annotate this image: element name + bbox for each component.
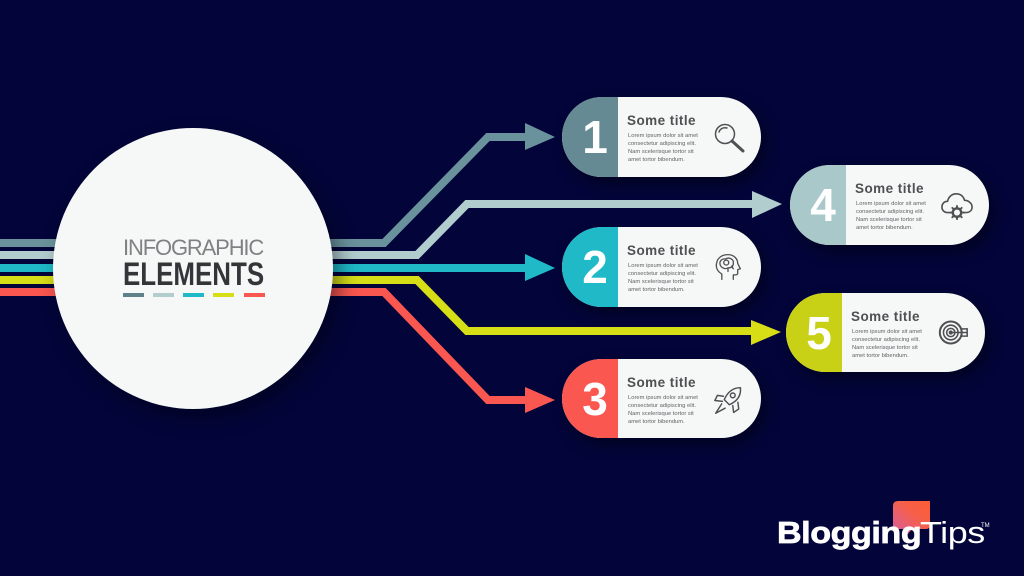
arrow: line 2 to card 2 — [0, 254, 555, 281]
body text 3: Lorem ipsum dolor sit amet — [628, 395, 698, 401]
tab 4 — [790, 165, 846, 245]
word: Blogging: Blogging — [777, 515, 921, 550]
body text 1 — [628, 133, 698, 163]
number 5: 5 — [806, 307, 832, 359]
body text 4: Lorem ipsum dolor sit amet — [856, 201, 926, 207]
body text 2: consectetur adipiscing elit. — [628, 271, 696, 277]
body text 4 — [856, 201, 926, 231]
tab 5 — [786, 293, 842, 372]
word: Tips: Tips — [920, 515, 985, 550]
title 1: Some title — [627, 113, 696, 128]
body text 3: Nam scelerisque tortor sit — [628, 411, 694, 417]
card 4 — [790, 165, 989, 245]
body text 1: Nam scelerisque tortor sit — [628, 149, 694, 155]
tab 1 — [562, 97, 618, 177]
icon: rocket — [714, 387, 742, 414]
body text 5: Nam scelerisque tortor sit — [852, 345, 918, 351]
body text 4: amet tortor bibendum. — [856, 225, 913, 231]
logo wordmark — [777, 515, 985, 550]
title 4: Some title — [855, 181, 924, 196]
title 3: Some title — [627, 375, 696, 390]
body text 5 — [852, 329, 922, 359]
arrow: line 4 to card 4 — [0, 191, 782, 255]
body text 3: amet tortor bibendum. — [628, 419, 685, 425]
tab 2 — [562, 227, 618, 307]
body text 5: consectetur adipiscing elit. — [852, 337, 920, 343]
body text 2 — [628, 263, 698, 293]
icon: target — [938, 320, 968, 344]
heading: infographic: INFOGRAPHIC — [123, 235, 263, 260]
title 2: Some title — [627, 243, 696, 258]
logo mark — [893, 501, 930, 534]
arrow: line 1 to card 1 — [0, 123, 555, 243]
trademark: TM — [981, 523, 990, 529]
icon: magnifier — [714, 124, 745, 153]
number 3: 3 — [582, 373, 608, 425]
heading: elements: ELEMENTS — [123, 256, 264, 292]
body text 4: consectetur adipiscing elit. — [856, 209, 924, 215]
number 4: 4 — [810, 179, 836, 231]
logo: BloggingTips — [777, 501, 990, 550]
central circle — [53, 128, 333, 409]
title 5: Some title — [851, 309, 920, 324]
body text 1: consectetur adipiscing elit. — [628, 141, 696, 147]
number 2: 2 — [582, 241, 608, 293]
card 5 — [786, 293, 985, 372]
icon: head with brain — [716, 254, 741, 280]
body text 2: amet tortor bibendum. — [628, 287, 685, 293]
card 1 — [562, 97, 761, 177]
body text 5: Lorem ipsum dolor sit amet — [852, 329, 922, 335]
body text 3: consectetur adipiscing elit. — [628, 403, 696, 409]
number 1: 1 — [582, 111, 608, 163]
card 3 — [562, 359, 761, 438]
colour key swatches — [123, 293, 265, 297]
body text 1: amet tortor bibendum. — [628, 157, 685, 163]
arrow: line 3 to card 3 — [0, 292, 555, 413]
body text 1: Lorem ipsum dolor sit amet — [628, 133, 698, 139]
tab 3 — [562, 359, 618, 438]
body text 2: Nam scelerisque tortor sit — [628, 279, 694, 285]
body text 5: amet tortor bibendum. — [852, 353, 909, 359]
body text 3 — [628, 395, 698, 425]
arrow: line 5 to card 5 — [0, 280, 781, 345]
card 2 — [562, 227, 761, 307]
body text 4: Nam scelerisque tortor sit — [856, 217, 922, 223]
icon: cloud with gear — [941, 193, 973, 220]
body text 2: Lorem ipsum dolor sit amet — [628, 263, 698, 269]
